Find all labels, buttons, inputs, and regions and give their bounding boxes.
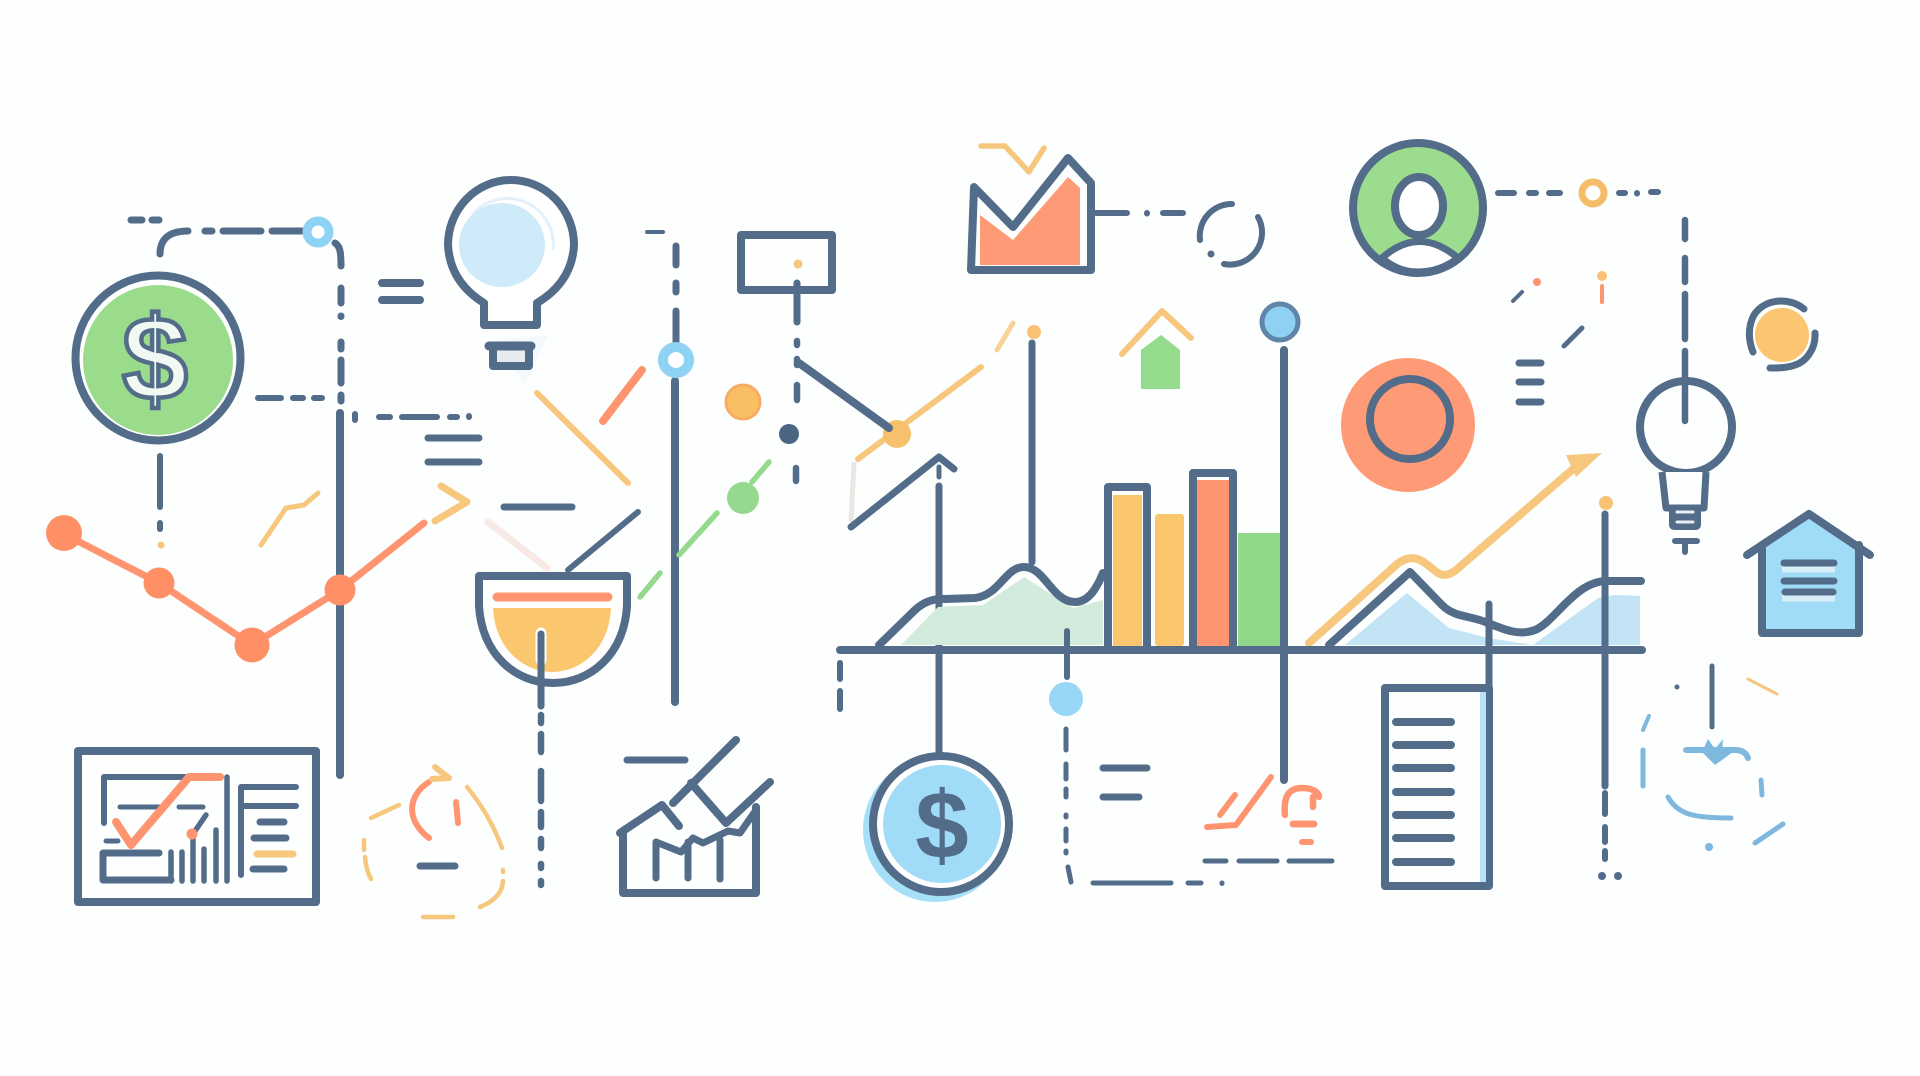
connector: dashes under card bbox=[796, 341, 797, 481]
icon: blue dollar coin: $ bbox=[915, 772, 969, 879]
connector: dashes below green coin bbox=[157, 456, 163, 529]
dot: dark bbox=[779, 424, 799, 444]
connector: blue pin bbox=[1262, 304, 1298, 780]
icon: green dollar coin bbox=[76, 276, 240, 440]
line: faint pink diagonal bbox=[488, 522, 547, 568]
icon: green house bbox=[1122, 311, 1191, 389]
connector: dashes with orange ring bbox=[1498, 182, 1658, 204]
icon: large light bulb bbox=[448, 180, 574, 385]
icon: cup with yellow fill bbox=[479, 576, 627, 706]
chart: coral line with nodes and arrow bbox=[46, 486, 467, 662]
dot: small yellow marker bbox=[158, 542, 164, 548]
line: pale orange diagonal bbox=[537, 393, 628, 483]
connector: top-left dashed path with blue ring bbox=[131, 220, 341, 266]
text lines: beside bulb bbox=[382, 283, 420, 300]
icon: dark arrow with drop line bbox=[851, 457, 954, 752]
icon: document bbox=[1385, 604, 1489, 886]
chart: bars bbox=[1108, 473, 1280, 650]
chart: green line with node bbox=[640, 462, 769, 597]
connector: vertical line from left column bbox=[340, 288, 341, 775]
dot: orange bbox=[726, 385, 760, 419]
connector: right vertical with dot and dashes bbox=[1598, 496, 1622, 880]
icon: open circle bbox=[1200, 204, 1262, 265]
connector: dashes to small bulb bbox=[1682, 220, 1688, 339]
panel: dashboard bbox=[78, 751, 316, 902]
small dash label bbox=[647, 230, 663, 234]
line: coral diagonal bbox=[603, 370, 642, 421]
icon: rectangle card with stem bbox=[741, 235, 832, 322]
chart: blue area with yellow arrow bbox=[1309, 453, 1641, 645]
icon: dashed blue circle with drop arrow bbox=[1643, 666, 1783, 851]
icon: house with rising chart bbox=[620, 740, 770, 893]
connector: dashes to open circle bbox=[1096, 210, 1183, 216]
marks: small scattered accents bbox=[1513, 271, 1607, 346]
text lines: right stacked bbox=[1519, 363, 1541, 402]
text lines: centre bbox=[1103, 768, 1147, 797]
connector: dashes under baseline left bbox=[837, 663, 843, 709]
icon: yellow circle with arcs bbox=[1749, 301, 1815, 368]
chart: green area bbox=[879, 567, 1103, 645]
line: dark diagonal and yellow rising line bbox=[799, 323, 1041, 459]
icon: small light bulb bbox=[1640, 351, 1732, 552]
line: dark diagonal into cup bbox=[568, 512, 638, 570]
icon: green dollar coin: $ bbox=[122, 293, 188, 425]
text lines: stacked dashes bbox=[428, 438, 572, 507]
icon: blue dollar coin bbox=[863, 756, 1009, 902]
icon: dashed yellow circle with coral arrow bbox=[364, 767, 503, 917]
connector: blue dot and dashes bbox=[1049, 631, 1083, 882]
icon: coral pencil and person bbox=[1207, 777, 1319, 842]
connector: vertical from orange dot bbox=[1028, 343, 1036, 562]
axis: horizontal baseline bbox=[840, 646, 1642, 654]
icon: blue house bbox=[1747, 514, 1870, 633]
connector: dashes bottom centre bbox=[1093, 861, 1332, 884]
icon: person avatar bbox=[1353, 143, 1483, 273]
connector: vertical with blue ring bbox=[663, 246, 689, 702]
chart: small yellow zigzag bbox=[261, 493, 318, 545]
icon: coral area chart bbox=[971, 146, 1091, 270]
connector: dashes right of green coin bbox=[258, 398, 469, 420]
icon: coral target bbox=[1341, 358, 1475, 492]
connector: dashes below cup bbox=[538, 715, 544, 885]
